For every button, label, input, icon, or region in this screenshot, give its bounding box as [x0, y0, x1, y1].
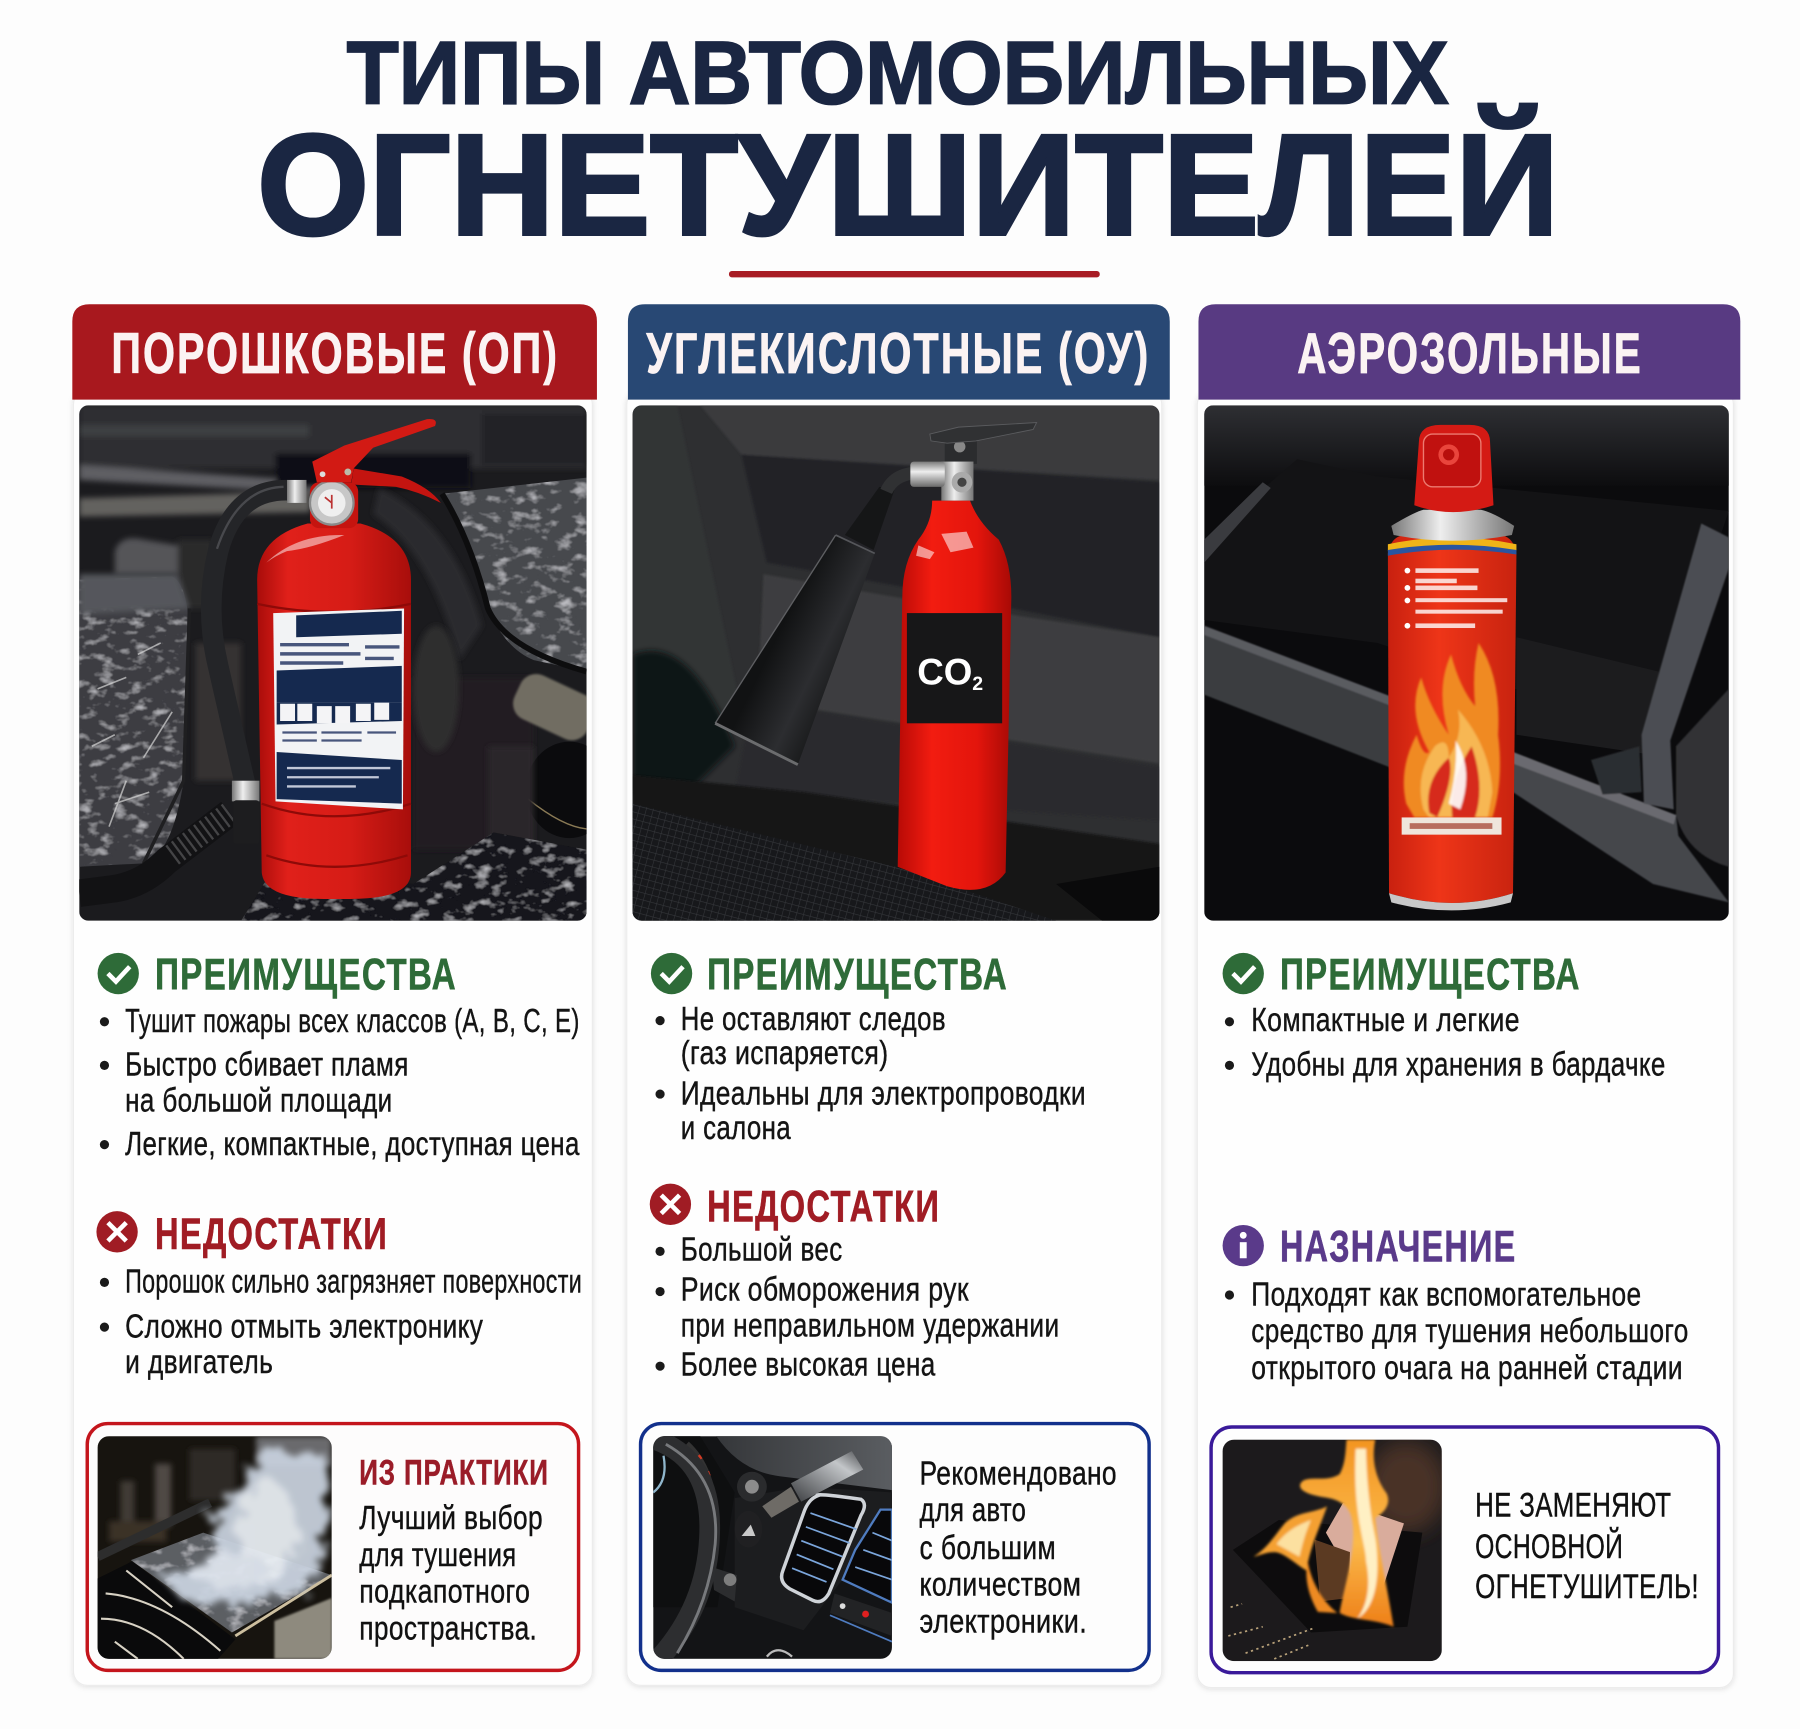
list: Легкие, компактные, доступная цена — [125, 1126, 580, 1163]
list: и салона — [681, 1110, 791, 1147]
advantages: powder — [98, 950, 580, 1163]
heading: ПРЕИМУЩЕСТВА — [155, 950, 457, 1000]
callout text: НЕ ЗАМЕНЯЮТ — [1475, 1487, 1671, 1525]
header: aerosol: АЭРОЗОЛЬНЫЕ — [1297, 322, 1643, 386]
list: при неправильном удержании — [681, 1307, 1060, 1344]
can body — [1388, 535, 1516, 903]
photo: CO2 extinguisher on car seat — [633, 405, 1159, 921]
gauges — [653, 1456, 665, 1492]
steering wheel — [652, 1438, 710, 1659]
lock — [737, 1472, 767, 1502]
callout text: для тушения — [359, 1537, 517, 1574]
icon: info — [1223, 1225, 1264, 1266]
callout text — [1475, 1487, 1699, 1606]
list: Большой вес — [681, 1232, 843, 1269]
central parts — [416, 845, 418, 846]
list: (газ испаряется) — [681, 1035, 889, 1072]
callout text: ОСНОВНОЙ — [1475, 1528, 1623, 1566]
flame — [1404, 643, 1500, 817]
right panel — [442, 478, 587, 672]
list: Не оставляют следов — [681, 1001, 946, 1038]
photo: CO2 extinguisher on car seat: 2 — [972, 673, 983, 695]
list: Порошок сильно загрязняет поверхности — [125, 1264, 582, 1301]
list — [100, 1264, 582, 1381]
header: CO2 — [628, 304, 1170, 400]
can bullet rows — [1405, 568, 1507, 629]
can shoulder — [1391, 510, 1514, 541]
header: powder: ПОРОШКОВЫЕ (ОП) — [111, 322, 559, 386]
photo: car dashboard — [652, 1436, 892, 1659]
paper — [1326, 1503, 1404, 1590]
switch — [712, 1567, 737, 1601]
list: Подходят как вспомогательное — [1251, 1276, 1642, 1313]
valve and gauge — [310, 482, 358, 528]
title: ОГНЕТУШИТЕЛЕЙ — [257, 104, 1559, 265]
callout heading: ИЗ ПРАКТИКИ — [359, 1452, 549, 1492]
left block — [79, 576, 189, 867]
list: Тушит пожары всех классов (А, В, С, Е) — [125, 1003, 580, 1040]
callout text: подкапотного — [359, 1574, 530, 1611]
buttons — [830, 1593, 892, 1636]
callout text: Рекомендовано — [920, 1455, 1117, 1492]
purpose: aerosol — [1223, 1222, 1689, 1387]
panel: powder extinguishers — [72, 304, 613, 1685]
callout text: с большим — [920, 1530, 1056, 1567]
header: powder — [72, 304, 597, 400]
list — [655, 1232, 1060, 1383]
photo: powder extinguisher in engine bay — [79, 405, 613, 921]
photo: burning bag — [1223, 1440, 1446, 1661]
callout text: пространства. — [359, 1610, 537, 1647]
list: и двигатель — [125, 1344, 273, 1381]
list: Компактные и легкие — [1251, 1002, 1520, 1039]
card background — [627, 390, 1162, 1685]
list — [655, 1001, 1086, 1147]
right cylinder — [512, 672, 587, 742]
photo: smoke under hood — [98, 1436, 332, 1659]
heading: НЕДОСТАТКИ — [155, 1209, 388, 1259]
vent — [782, 1495, 864, 1602]
callout text — [920, 1455, 1117, 1640]
title: ТИПЫ АВТОМОБИЛЬНЫХ — [347, 22, 1449, 122]
advantages: CO2 — [651, 950, 1086, 1147]
body — [257, 524, 411, 899]
list: Идеальны для электропроводки — [681, 1075, 1086, 1112]
list: Более высокая цена — [681, 1346, 936, 1383]
disadvantages: powder — [96, 1209, 582, 1381]
icon: check — [1223, 953, 1264, 994]
disadvantages: CO2 — [650, 1182, 1060, 1383]
corrugated hose — [79, 813, 230, 893]
valve — [944, 441, 977, 464]
list: Риск обморожения рук — [681, 1272, 969, 1309]
list — [100, 1003, 580, 1163]
can label strip — [1402, 817, 1502, 835]
header: aerosol — [1198, 304, 1740, 400]
cone horn — [715, 535, 875, 765]
list: Быстро сбивает пламя — [125, 1047, 409, 1084]
icon: cross — [650, 1184, 691, 1225]
photo: CO2 extinguisher on car seat: CO — [917, 651, 972, 692]
callout: from practice — [87, 1424, 579, 1670]
list — [1225, 1002, 1666, 1084]
title — [257, 22, 1559, 265]
callout text: ОГНЕТУШИТЕЛЬ! — [1475, 1568, 1699, 1606]
panel: CO2 extinguishers — [627, 304, 1170, 1685]
callout: recommendation — [641, 1424, 1149, 1670]
body — [898, 501, 1011, 890]
list: Сложно отмыть электронику — [125, 1308, 483, 1345]
card background — [1197, 390, 1733, 1688]
handle — [762, 1487, 799, 1518]
callout text — [359, 1500, 543, 1647]
photo: aerosol can in glovebox — [1204, 405, 1729, 921]
bottom — [241, 832, 587, 921]
card background — [73, 390, 592, 1685]
icon: check — [98, 953, 139, 994]
list: открытого очага на ранней стадии — [1251, 1350, 1683, 1387]
strut — [1642, 524, 1729, 809]
list: средство для тушения небольшого — [1251, 1313, 1689, 1350]
list — [1225, 1276, 1689, 1387]
smoke — [161, 1449, 327, 1607]
flames — [1254, 1440, 1394, 1627]
bag — [1233, 1520, 1422, 1632]
list: Удобны для хранения в бардачке — [1251, 1047, 1666, 1084]
CO2 label — [907, 613, 1002, 723]
icon: cross — [96, 1211, 138, 1253]
header: CO2: УГЛЕКИСЛОТНЫЕ (ОУ) — [646, 322, 1150, 386]
lever — [312, 419, 436, 482]
icon: check — [651, 953, 692, 994]
advantages: aerosol — [1223, 950, 1666, 1084]
can cap — [1414, 425, 1493, 512]
heading: НАЗНАЧЕНИЕ — [1280, 1222, 1516, 1272]
title underline — [729, 271, 1100, 277]
callout text: электроники. — [920, 1603, 1087, 1640]
callout text: Лучший выбор — [359, 1500, 543, 1537]
heading: ПРЕИМУЩЕСТВА — [707, 950, 1008, 1000]
label — [273, 609, 404, 809]
hose — [211, 490, 289, 786]
callout text: для авто — [920, 1492, 1026, 1529]
list: на большой площади — [125, 1082, 393, 1119]
heading: НЕДОСТАТКИ — [707, 1182, 940, 1232]
glovebox bar — [1204, 524, 1729, 902]
callout: warning — [1211, 1427, 1718, 1673]
heading: ПРЕИМУЩЕСТВА — [1280, 950, 1581, 1000]
panel: aerosol extinguishers — [1197, 304, 1740, 1688]
callout text: количеством — [920, 1567, 1081, 1604]
